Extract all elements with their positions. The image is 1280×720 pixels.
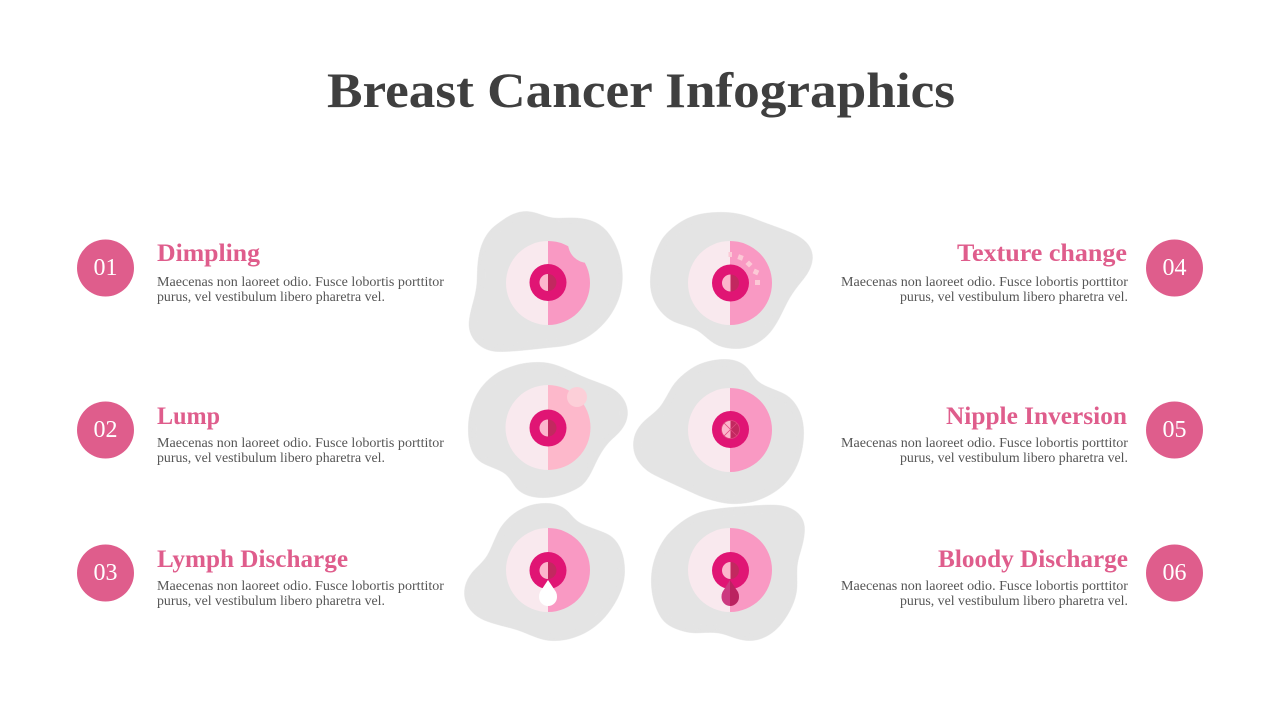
description 03: Maecenas non laoreet odio. Fusce lobortis porttitor bbox=[157, 578, 445, 593]
description 06: purus, vel vestibulum libero pharetra vel. bbox=[900, 593, 1128, 608]
description 05: Maecenas non laoreet odio. Fusce lobortis porttitor bbox=[841, 435, 1129, 450]
description 03: purus, vel vestibulum libero pharetra vel. bbox=[157, 593, 385, 608]
texture spots bbox=[728, 252, 760, 285]
description 02 bbox=[157, 435, 445, 465]
description 05 bbox=[841, 435, 1129, 465]
description 03 bbox=[157, 578, 445, 608]
item 06: bloody discharge text bbox=[841, 544, 1203, 608]
description 04: Maecenas non laoreet odio. Fusce lobortis porttitor bbox=[841, 274, 1129, 289]
inverted nipple lines bbox=[722, 420, 740, 438]
item 02: lump text bbox=[77, 402, 445, 465]
heading: Bloody Discharge: Bloody Discharge bbox=[938, 546, 1128, 573]
number badge 04 bbox=[1146, 240, 1203, 296]
number badge 03 bbox=[77, 544, 134, 602]
number badge 05 bbox=[1146, 402, 1203, 458]
lymph drop bbox=[539, 580, 557, 606]
heading: Lymph Discharge: Lymph Discharge bbox=[157, 546, 348, 573]
description 01: purus, vel vestibulum libero pharetra vel. bbox=[157, 289, 385, 304]
description 04: purus, vel vestibulum libero pharetra vel. bbox=[900, 289, 1128, 304]
item 05: nipple inversion text bbox=[841, 402, 1203, 465]
number badge 04: 04 bbox=[1162, 255, 1186, 281]
description 01: Maecenas non laoreet odio. Fusce lobortis porttitor bbox=[157, 274, 445, 289]
description 02: purus, vel vestibulum libero pharetra vel. bbox=[157, 450, 385, 465]
heading: Dimpling: Dimpling bbox=[157, 240, 261, 267]
item 04: texture change text bbox=[841, 240, 1203, 304]
lump bbox=[567, 387, 587, 407]
illustration: dimpling breast bbox=[469, 211, 623, 352]
illustration: nipple inversion breast bbox=[633, 359, 804, 504]
illustration: lymph discharge breast bbox=[464, 503, 625, 641]
illustration: bloody discharge breast bbox=[651, 505, 805, 641]
number badge 02 bbox=[77, 402, 134, 458]
heading: Nipple Inversion: Nipple Inversion bbox=[946, 403, 1127, 430]
description 06 bbox=[841, 578, 1129, 608]
description 04 bbox=[841, 274, 1129, 304]
number badge 01 bbox=[77, 240, 134, 296]
description 05: purus, vel vestibulum libero pharetra vel. bbox=[900, 450, 1128, 465]
item 01: dimpling text bbox=[77, 240, 445, 304]
number badge 02: 02 bbox=[94, 417, 118, 443]
description 02: Maecenas non laoreet odio. Fusce lobortis porttitor bbox=[157, 435, 445, 450]
illustration: lump breast bbox=[468, 362, 628, 498]
description 06: Maecenas non laoreet odio. Fusce lobortis porttitor bbox=[841, 578, 1129, 593]
item 03: lymph discharge text bbox=[77, 544, 445, 608]
number badge 01: 01 bbox=[94, 255, 118, 281]
description 01 bbox=[157, 274, 445, 304]
number badge 03: 03 bbox=[94, 560, 118, 586]
title: Breast Cancer Infographics bbox=[327, 62, 955, 118]
number badge 05: 05 bbox=[1162, 417, 1186, 443]
blood drop bbox=[722, 580, 739, 606]
number badge 06 bbox=[1146, 544, 1203, 602]
heading: Texture change: Texture change bbox=[957, 240, 1127, 267]
heading: Lump: Lump bbox=[157, 403, 220, 430]
number badge 06: 06 bbox=[1162, 560, 1186, 586]
illustration: texture change breast bbox=[650, 212, 813, 349]
